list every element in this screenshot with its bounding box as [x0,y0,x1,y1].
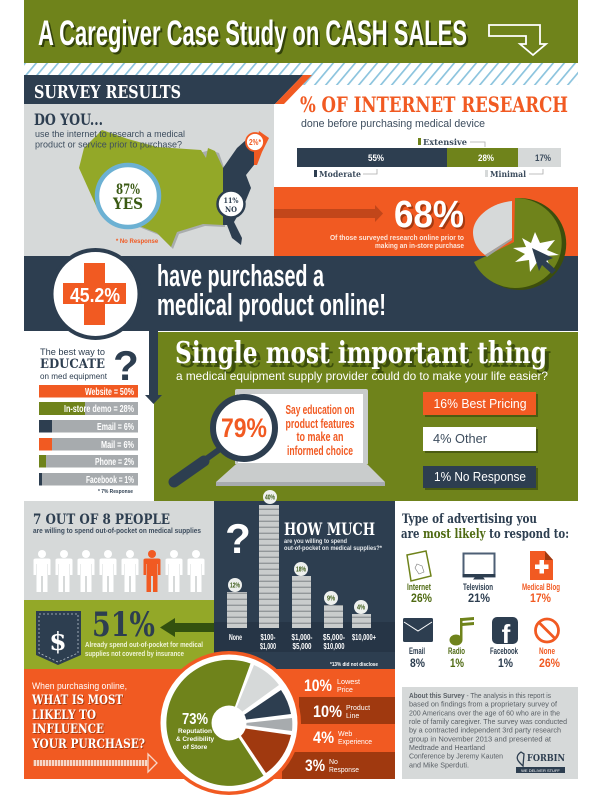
survey description: Medtrade and Heartland [409,743,485,752]
icon: medical blog document [530,551,553,580]
11% no callout: NO [225,205,237,214]
68% stat: Of those surveyed research online prior to [330,235,464,242]
radio label: Radio [448,646,465,656]
pictogram of people [34,550,204,592]
option: other [423,427,538,453]
survey results heading [24,75,312,104]
question text: WHAT IS MOST [31,693,123,708]
87% yes callout: 87% [116,182,140,198]
heading: out-of-pocket on medical supplies?* [284,545,382,552]
2% no response callout [246,133,264,151]
panel: most likely to influence [24,669,395,779]
arrow [274,205,383,222]
internet label: 26% [411,591,432,605]
do you question: DO YOU... [34,110,103,129]
bar legend: Moderate [319,169,361,179]
icon: magnifying glass [174,397,275,482]
laptop text: Say education on [286,402,355,417]
icon: question mark: ? [113,342,139,389]
coin stack chart: 4% [357,604,366,612]
11% no callout: 11% [224,196,238,205]
51% stat [85,605,203,658]
radio label [448,646,465,670]
stacked bar chart: 55% [368,153,384,163]
icon: question mark: ? [225,515,251,562]
option: best pricing: 16% Best Pricing [434,396,526,411]
heading [40,347,108,381]
no response note: * No Response [116,239,159,245]
legend rows: 3% [305,756,325,775]
none label: None [539,646,555,656]
73% pie label: Reputation [178,728,212,735]
icon: magnifying glass: 79% [221,413,267,443]
question text: YOUR PURCHASE? [31,737,145,752]
panel: about this survey [402,687,578,779]
legend rows: Experience [338,739,372,746]
heading: The best way to [40,347,105,357]
bar list: In-store demo = 28% [64,404,134,415]
email label: Email [409,646,425,656]
survey description: role of family caregiver. The survey was conducted [409,717,567,726]
heading: on med equipment [40,371,108,381]
panel: percent of internet research [297,92,568,179]
callout: 45.2% medical cross [52,250,140,338]
bar legend: Minimal [490,169,526,179]
heading: are most likely to respond to: [401,527,569,542]
logo: Forbin: FORBIN [527,754,565,764]
bar list [39,385,138,486]
2% no response callout: 2%* [249,138,262,147]
panel: best way to educate [39,342,139,495]
panel: how much [214,490,395,669]
survey description: group in November 2013 and presented at [409,734,552,743]
bar list: Phone = 2% [95,457,134,468]
coin stack chart: $5,000- [323,633,345,642]
icon: television [462,554,496,580]
question text: INFLUENCE [32,722,104,737]
legend rows: Line [346,713,359,720]
medical blog label: Medical Blog [522,582,560,592]
bar legend [314,137,543,179]
none label [539,646,560,670]
laptop text: to make an [296,429,344,444]
heading [175,336,551,383]
bar list: Mail = 6% [101,440,134,451]
icon: internet tablet [407,551,431,581]
heading: are willing to spend out-of-pocket on medical supplies [33,526,201,535]
51% stat: Already spend out-of-pocket for medical [85,640,203,649]
heading: 7 OUT OF 8 PEOPLE [33,512,170,528]
survey description: Conference by Jeremy Kauten [409,752,503,761]
radio label: 1% [450,656,464,670]
stacked bar chart: 28% [478,153,494,163]
do you question: use the internet to research a medical [35,129,185,140]
laptop text [286,402,355,458]
68% stat [330,194,466,250]
bar list: Facebook = 1% [86,475,134,486]
icon: burst and cursor [513,232,559,274]
question text: YOUR PURCHASE? [32,738,146,753]
email label: 8% [410,656,425,670]
stacked bar chart [297,148,561,167]
68% stat: 68% [394,194,464,236]
heading: are you willing to spend [284,538,347,545]
logo: Forbin: WE DELIVER STUFF [521,768,560,773]
73% pie label: 73% [182,711,208,728]
internet label [407,582,432,605]
bar list: Email = 6% [97,422,134,433]
legend rows: Price [337,687,353,694]
51% stat: 51% [92,605,155,645]
survey results heading: SURVEY RESULTS [34,82,181,103]
laptop text: product features [286,416,354,431]
icon: facebook: f [502,619,511,649]
coin stack chart: 18% [296,566,307,574]
question text [31,681,146,753]
facebook label [490,646,519,670]
73% pie label: & Credibility [176,736,215,743]
legend rows: No [329,759,338,766]
facebook label: 1% [498,656,513,670]
stacked bar chart: 17% [535,153,551,163]
coin stack chart: $5,000 [292,642,312,651]
legend rows: Product [346,705,370,712]
header banner [24,0,578,63]
callout: 45.2% medical cross: 45.2% [70,285,120,307]
option: best pricing [423,392,538,417]
legend rows: 4% [313,728,334,747]
television label [463,582,493,605]
footnote: * 7% Response [98,489,133,495]
coin stack chart: $10,000 [324,642,345,651]
11% no callout [218,190,244,218]
panel: advertising types [401,512,569,670]
coin stack chart: 9% [327,596,336,602]
87% yes callout [97,165,159,227]
panel: 51% out of pocket [24,600,214,669]
survey description [409,691,567,769]
heading: HOW MUCH [284,520,375,540]
survey description: and Mike Sperduti. [409,760,469,769]
heading [157,258,386,322]
medical blog label [522,582,560,605]
coin stack chart [227,490,376,651]
heading: medical product online! [157,287,386,322]
heading [401,512,569,542]
map of the United States [79,130,269,249]
legend rows: 10% [313,702,342,721]
panel: 68% research online [274,187,578,256]
coin stack chart: $1,000 [260,642,276,651]
television label: 21% [468,591,490,605]
legend rows [282,676,395,779]
arrow: down to education panel [145,331,162,404]
coin stack chart: 12% [230,582,241,590]
51% stat: supplies not covered by insurance [85,649,184,658]
arrow [160,618,214,637]
option: no response [423,466,538,490]
heading [33,512,201,535]
icon: laptop [216,389,385,486]
survey description: About this Survey - The analysis in this report is [409,691,551,700]
arrow [33,754,157,772]
panel: single most important thing [154,332,578,501]
panel: survey results map [24,75,312,256]
pie chart: 68% research [473,198,566,290]
question text: INFLUENCE [33,723,105,738]
option: other: 4% Other [433,431,488,446]
68% stat: 68% [396,196,466,238]
heading: Type of advertising you [402,512,537,527]
heading [284,520,382,552]
legend rows: Response [329,767,359,774]
striped divider [24,63,578,85]
do you question: product or service prior to purchase? [35,140,182,150]
icon: email envelope [403,618,433,642]
laptop text: informed choice [287,443,353,458]
icon: radio music note [450,617,474,646]
question text: WHAT IS MOST [32,694,124,709]
bar list: Website = 50% [85,387,134,398]
73% pie label: of Store [183,744,208,751]
panel: 7 out of 8 people [24,501,214,600]
question text: LIKELY TO [33,709,97,724]
television label: Television [463,582,493,592]
question text: When purchasing online, [32,681,127,692]
73% pie label [176,711,215,751]
do you question [34,110,185,150]
internet label: Internet [407,582,431,592]
icon: corner arrow [489,25,546,55]
coin stack chart: $10,000+ [352,633,376,642]
medical blog label: 17% [530,591,551,605]
heading: EDUCATE [40,357,105,372]
question text: LIKELY TO [32,708,96,723]
bar legend: Extensive [423,137,467,147]
option: no response: 1% No Response [434,469,526,484]
heading: a medical equipment supply provider could do to make your life easier? [176,369,548,383]
coin stack chart: $100- [260,633,276,642]
research heading: done before purchasing medical device [301,118,485,130]
band: have purchased online [24,256,578,331]
icon: jeans pocket with dollar: $ [49,627,67,656]
coin stack chart: 40% [265,494,276,502]
logo: Forbin [516,752,565,773]
survey description: by a contracted independent 3rd party research [409,726,561,735]
87% yes callout: YES [112,194,143,213]
icon: facebook [492,617,518,649]
coin stack chart: $1,000- [292,633,313,642]
icon: none prohibition [536,619,558,642]
survey description: based on findings from a proprietary survey of [409,700,558,709]
heading: have purchased a [157,258,324,293]
survey description: 200 Americans over the age of 60 who are in the [409,708,560,717]
icon: jeans pocket with dollar [36,611,81,665]
research heading [300,92,568,130]
email label [409,646,425,670]
footnote: *13% did not disclose [330,662,378,668]
legend rows: 10% [304,676,332,695]
none label: 26% [539,656,560,670]
facebook label: Facebook [490,646,519,656]
68% stat: making an in-store purchase [375,243,464,250]
legend rows: Web [338,731,352,738]
coin stack chart: None [229,633,242,642]
legend rows: Lowest [337,679,360,686]
pie chart: purchase influence [157,651,301,795]
